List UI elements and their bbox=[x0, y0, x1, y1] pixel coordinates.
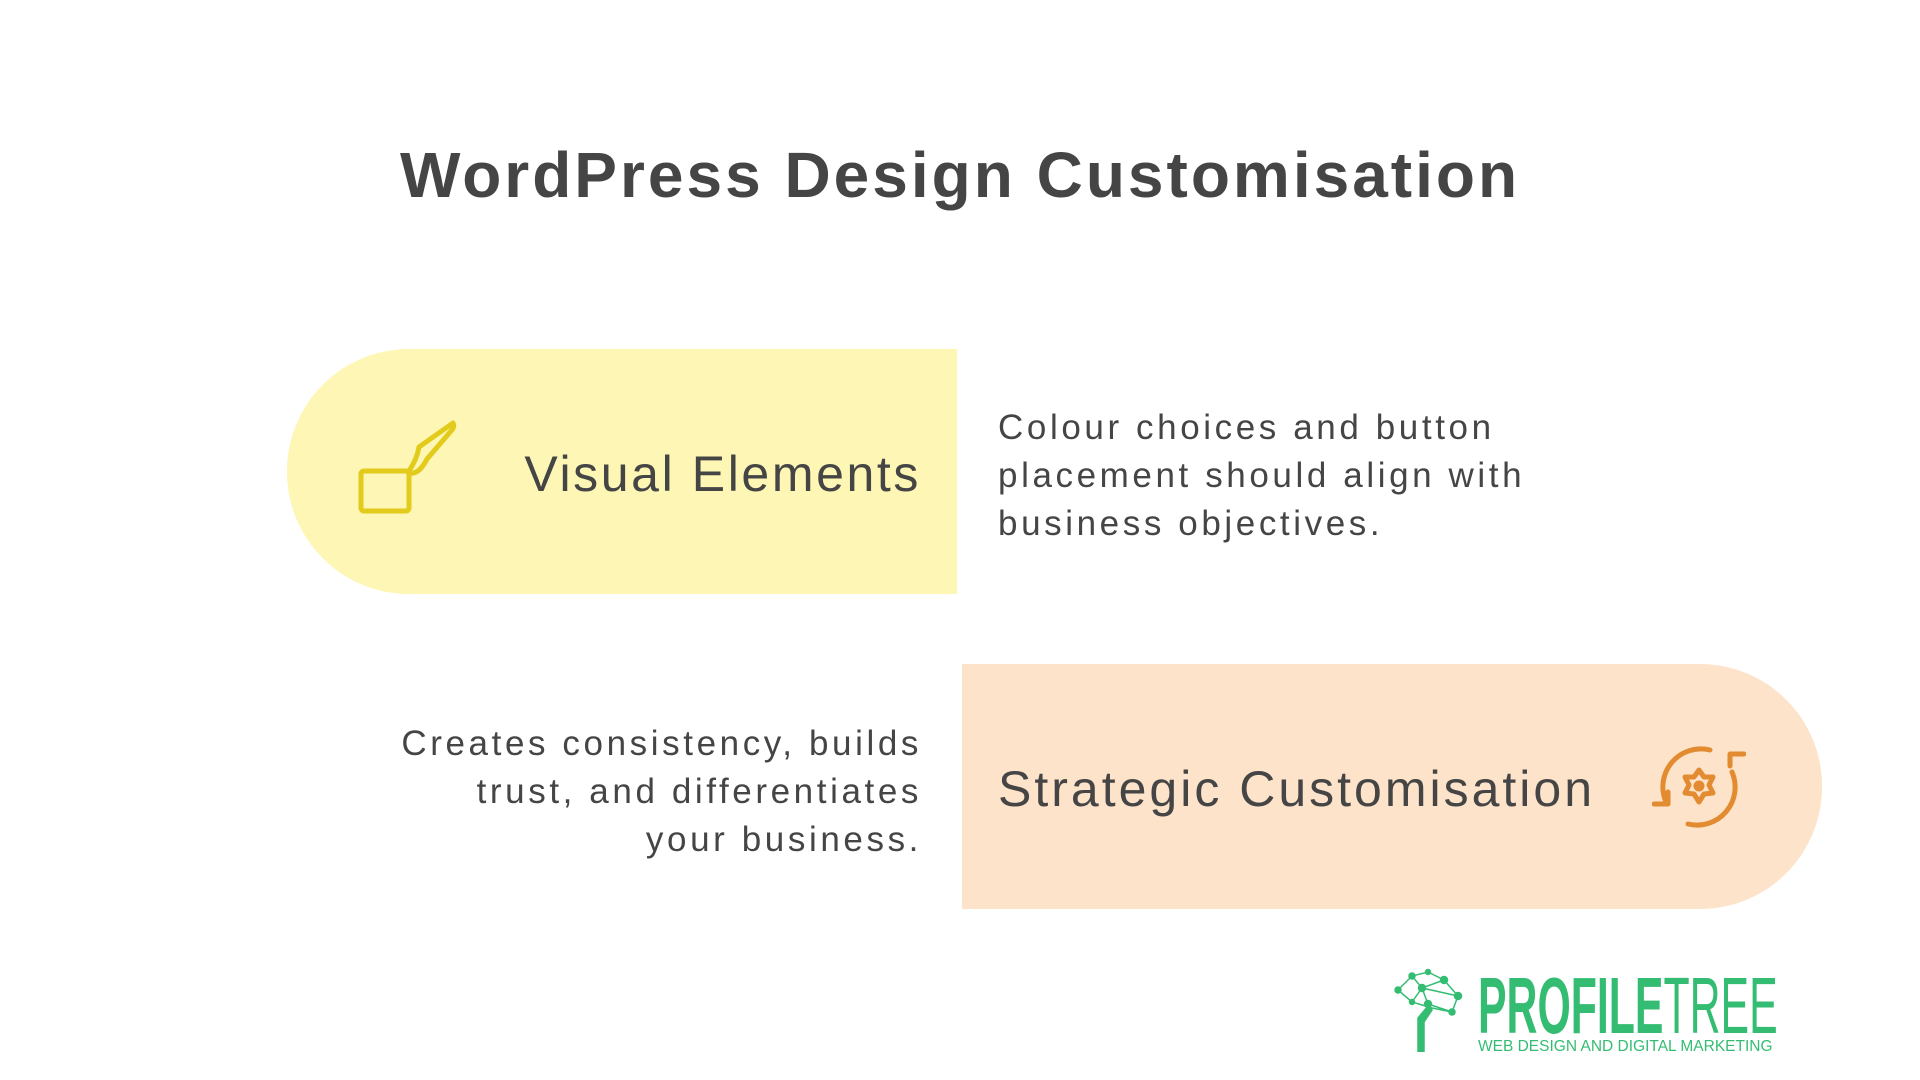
logo wordmark: PROFILETREE bbox=[1478, 961, 1778, 1050]
heading: Visual Elements: Visual Elements bbox=[524, 446, 921, 502]
icon: gear with cycle arrows bbox=[1652, 746, 1746, 828]
logo: ProfileTree bbox=[1394, 961, 1778, 1055]
text: strategic description: trust, and differentiates bbox=[477, 772, 922, 811]
text: visual elements description bbox=[998, 408, 1525, 543]
title: WordPress Design Customisation bbox=[400, 139, 1520, 211]
panel: strategic customisation bbox=[962, 664, 1822, 909]
text: strategic description bbox=[401, 724, 922, 859]
logo tagline: WEB DESIGN AND DIGITAL MARKETING bbox=[1478, 1038, 1773, 1055]
text: visual elements description: Colour choices and button bbox=[998, 408, 1495, 447]
text: strategic description: your business. bbox=[646, 820, 922, 859]
text: visual elements description: placement should align with bbox=[998, 456, 1525, 495]
icon: tree bbox=[1394, 968, 1462, 1052]
icon: paint brush bbox=[358, 420, 456, 514]
heading: Strategic Customisation: Strategic Customisation bbox=[998, 761, 1595, 817]
text: visual elements description: business objectives. bbox=[998, 504, 1383, 543]
text: strategic description: Creates consistency, builds bbox=[401, 724, 922, 763]
panel: visual elements bbox=[287, 349, 957, 594]
